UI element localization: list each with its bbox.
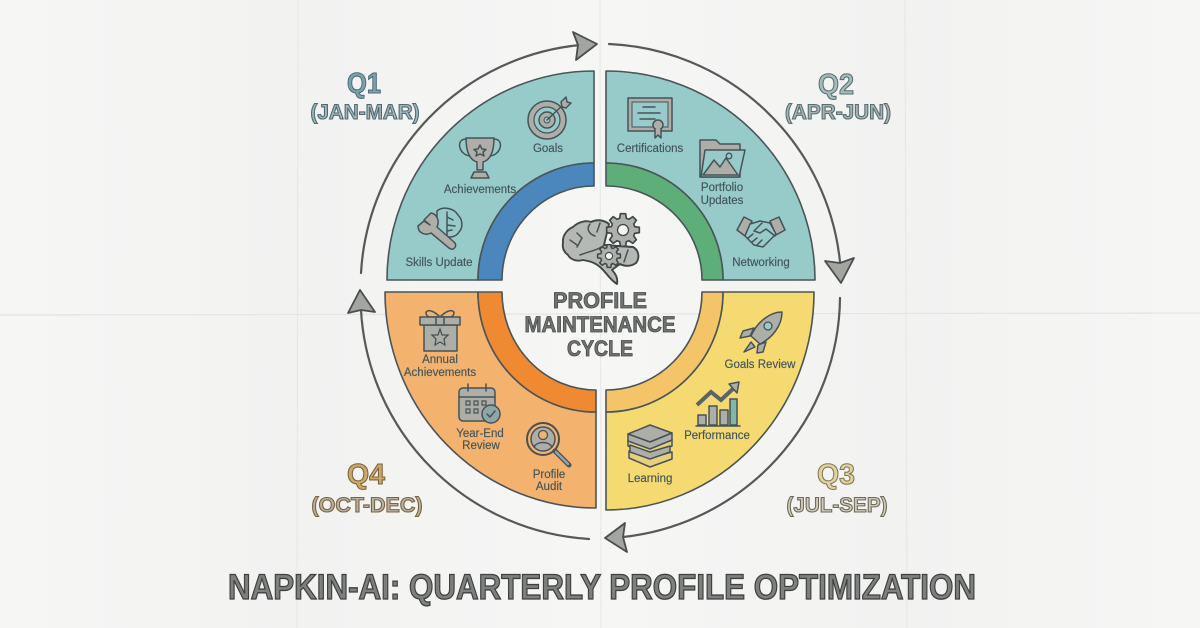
label: Year-End Review: Review <box>462 440 501 452</box>
icon: folder <box>700 140 745 177</box>
label: Q2: Q2 <box>818 69 854 101</box>
label: Q4: (OCT-DEC) <box>312 494 422 517</box>
label: Skills Update: Skills Update <box>405 257 473 269</box>
Q4 ring <box>478 292 596 412</box>
Q1 ring <box>478 163 594 280</box>
label: Profile Audit <box>533 469 565 493</box>
label: Portfolio Updates: Portfolio <box>701 182 743 194</box>
panel: Q3 <box>606 292 814 510</box>
label: Learning: Learning <box>628 473 672 485</box>
arrow: Q1 to Q2 <box>361 32 597 273</box>
center label: MAINTENANCE <box>524 312 676 337</box>
icon: books <box>628 425 672 467</box>
cycle arrows <box>348 32 854 552</box>
label: Annual Achievements: Annual <box>422 354 458 366</box>
label: Portfolio Updates: Updates <box>701 195 744 207</box>
icon: trophy <box>460 138 500 178</box>
label: Profile Audit: Audit <box>536 481 563 493</box>
label: Q4 <box>312 459 422 517</box>
label: Year-End Review: Year-End <box>456 428 504 440</box>
icon: wrench and brain <box>418 208 462 249</box>
panel: Q2 <box>606 71 815 280</box>
panel: Q4 <box>385 292 596 508</box>
label: Q3: (JUL-SEP) <box>786 494 888 517</box>
icon: rocket <box>740 312 782 353</box>
icon: target <box>528 97 571 139</box>
icon: brain and gears <box>563 214 639 284</box>
Q3 sector <box>606 292 814 510</box>
icon: calendar <box>459 384 500 423</box>
label: Q1 <box>310 68 420 124</box>
Q1 sector <box>387 71 594 280</box>
label: Q1: Q1 <box>347 68 381 100</box>
label: Annual Achievements: Achievements <box>404 367 476 379</box>
icon: magnifier profile <box>527 423 569 465</box>
label: Q4: Q4 <box>347 459 385 491</box>
label: Year-End Review <box>456 428 504 452</box>
label: Q3: Q3 <box>817 459 855 491</box>
label: Certifications: Certifications <box>617 143 683 155</box>
label: Goals: Goals <box>533 143 563 155</box>
center label: CYCLE <box>567 336 633 361</box>
title: NAPKIN-AI: QUARTERLY PROFILE OPTIMIZATION <box>228 568 976 607</box>
label: Q2 <box>785 69 891 124</box>
Q3 ring <box>606 292 723 412</box>
panel: Q1 <box>387 71 594 280</box>
label: Profile Audit: Profile <box>533 469 565 481</box>
icon: certificate <box>628 98 672 138</box>
label: Portfolio Updates <box>701 182 744 207</box>
Q2 ring <box>606 163 723 280</box>
label: Goals Review: Goals Review <box>725 359 796 371</box>
arrow: Q4 to Q1 <box>348 290 589 539</box>
Q4 sector <box>385 292 596 508</box>
center label: PROFILE <box>553 288 647 313</box>
arrow: Q2 to Q3 <box>609 44 854 283</box>
center label <box>524 288 676 361</box>
label: Q3 <box>786 459 888 517</box>
label: Annual Achievements <box>404 354 476 379</box>
arrow: Q3 to Q4 <box>605 298 840 552</box>
label: Q1: (JAN-MAR) <box>310 101 420 124</box>
Q2 sector <box>606 71 815 280</box>
icon: gift <box>420 311 460 351</box>
label: Networking: Networking <box>732 257 790 269</box>
label: Q2: (APR-JUN) <box>785 101 891 124</box>
label: Performance: Performance <box>684 430 750 442</box>
icon: bar chart <box>696 382 740 426</box>
icon: handshake <box>737 217 785 247</box>
label: Achievements: Achievements <box>444 184 516 196</box>
